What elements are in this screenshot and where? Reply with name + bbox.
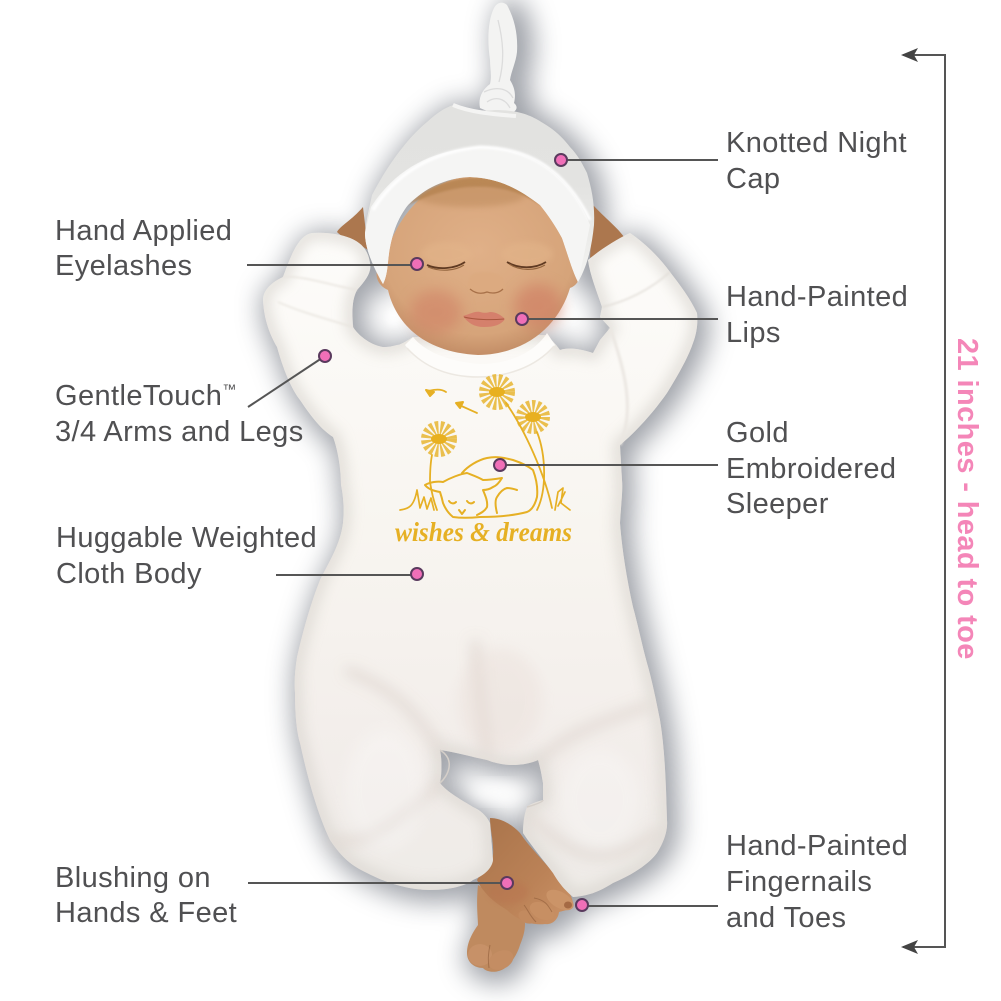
callout: Hand-Painted Fingernails and Toes: Hand-Painted xyxy=(726,830,908,862)
callout: Hand Applied Eyelashes: Eyelashes xyxy=(55,250,192,282)
grass xyxy=(400,488,570,510)
height bracket with arrows xyxy=(901,48,945,954)
drifting seeds xyxy=(428,390,477,413)
callout: Blushing on Hands & Feet xyxy=(55,862,513,929)
eyelids xyxy=(421,242,473,266)
soft drop shadow xyxy=(268,6,702,977)
gold embroidery xyxy=(400,381,570,518)
height label: 21 inches - head to toe xyxy=(951,338,983,660)
callout: Blushing on Hands & Feet: Blushing on xyxy=(55,862,211,894)
callout: Hand-Painted Lips xyxy=(516,281,908,349)
callout: GentleTouch 3/4 Arms and Legs: 3/4 Arms and Legs xyxy=(55,416,304,448)
callout: Hand Applied Eyelashes xyxy=(55,215,423,282)
sleeping lamb xyxy=(425,457,537,518)
callout: GentleTouch 3/4 Arms and Legs: ™ xyxy=(222,381,237,397)
white glow in gaps xyxy=(387,310,399,326)
callout: Hand-Painted Fingernails and Toes: and Toes xyxy=(726,902,846,934)
callout: Blushing on Hands & Feet: Hands & Feet xyxy=(55,897,237,929)
hem lines xyxy=(440,750,543,807)
callout: Gold Embroidered Sleeper: Embroidered xyxy=(726,453,896,485)
script text: wishes & dreams xyxy=(395,517,572,547)
callout: Huggable Weighted Cloth Body: Cloth Body xyxy=(56,558,202,590)
callout: Hand-Painted Lips: Lips xyxy=(726,317,781,349)
callout: Knotted Night Cap xyxy=(555,127,907,195)
hands behind head xyxy=(337,205,624,258)
callout: Gold Embroidered Sleeper xyxy=(494,417,896,520)
doll illustration xyxy=(263,3,702,977)
callout: Hand-Painted Fingernails and Toes: Fingernails xyxy=(726,866,872,898)
dandelion flowers xyxy=(428,381,552,510)
sleeper body xyxy=(263,233,697,897)
knotted night cap xyxy=(365,3,594,284)
sleeve cuff folds xyxy=(278,277,357,327)
callout: GentleTouch 3/4 Arms and Legs: GentleTouch xyxy=(55,380,222,412)
callout: Gold Embroidered Sleeper: Sleeper xyxy=(726,488,829,520)
eyelashes xyxy=(427,262,465,268)
callout: Knotted Night Cap: Knotted Night xyxy=(726,127,907,159)
feet xyxy=(467,818,577,974)
callout: GentleTouch 3/4 Arms and Legs xyxy=(55,350,331,448)
callout: Huggable Weighted Cloth Body xyxy=(56,522,423,590)
callout: Hand-Painted Fingernails and Toes xyxy=(576,830,908,934)
nose xyxy=(468,272,505,294)
callout: Gold Embroidered Sleeper: Gold xyxy=(726,417,789,449)
cheeks xyxy=(410,290,462,334)
fabric shading xyxy=(330,640,660,855)
lips xyxy=(463,312,505,327)
edge shading xyxy=(263,233,697,897)
callout: Hand Applied Eyelashes: Hand Applied xyxy=(55,215,232,247)
head xyxy=(377,175,580,355)
callout: Hand-Painted Lips: Hand-Painted xyxy=(726,281,908,313)
callout: Huggable Weighted Cloth Body: Huggable Weighted xyxy=(56,522,317,554)
collar xyxy=(405,333,555,376)
hair xyxy=(408,177,540,205)
callout: Knotted Night Cap: Cap xyxy=(726,163,780,195)
